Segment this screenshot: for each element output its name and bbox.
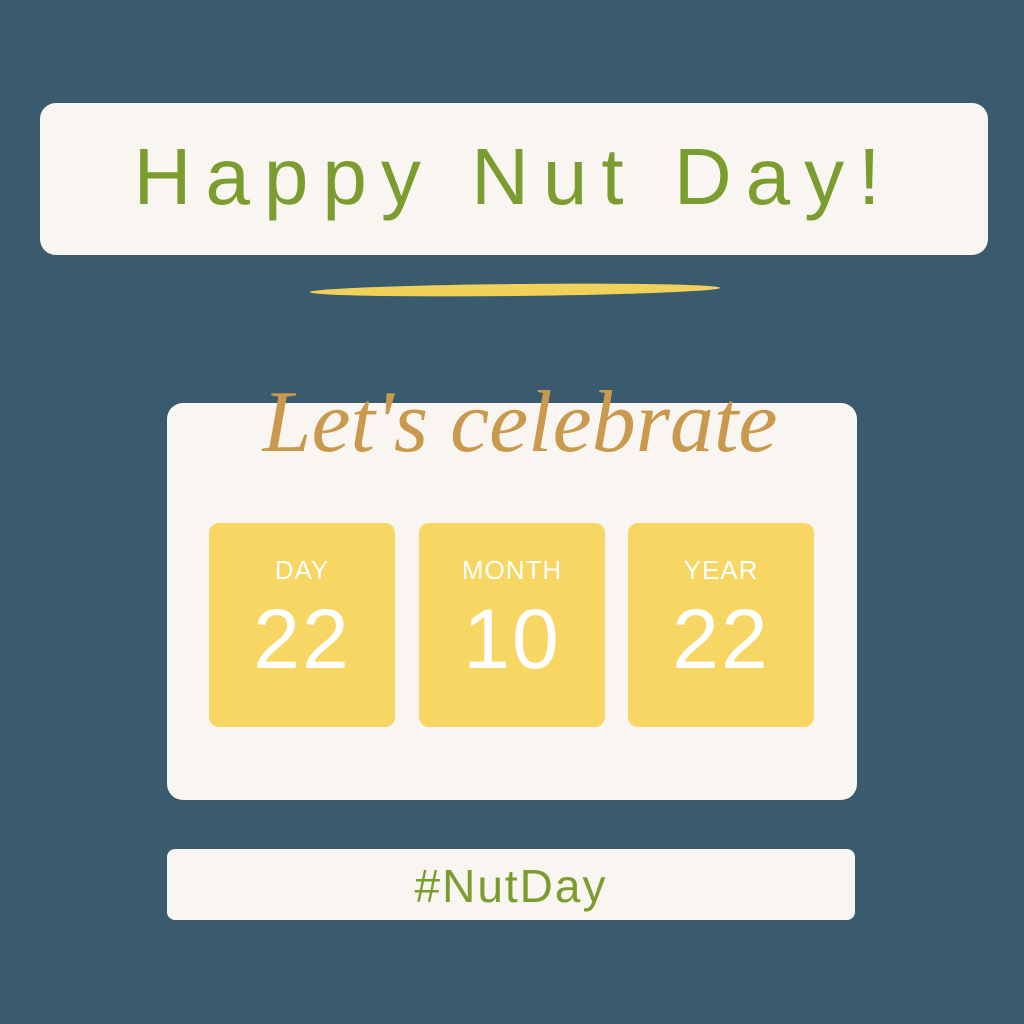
panel: date card	[167, 403, 857, 800]
title: Happy Nut Day!	[134, 132, 894, 221]
tile: year: 22	[672, 592, 770, 686]
title banner	[40, 103, 988, 255]
tile: year: YEAR	[684, 555, 758, 585]
tile: day	[209, 523, 395, 727]
tile: month	[419, 523, 605, 727]
yellow brush underline	[310, 282, 720, 298]
tile: year	[628, 523, 814, 727]
tile: month: 10	[463, 592, 561, 686]
tile: day: 22	[253, 592, 351, 686]
tile: day: DAY	[275, 555, 329, 585]
hashtag bar	[167, 849, 855, 920]
script heading: Let's celebrate	[263, 374, 777, 471]
tile: month: MONTH	[462, 555, 562, 585]
hashtag text: #NutDay	[415, 860, 607, 912]
